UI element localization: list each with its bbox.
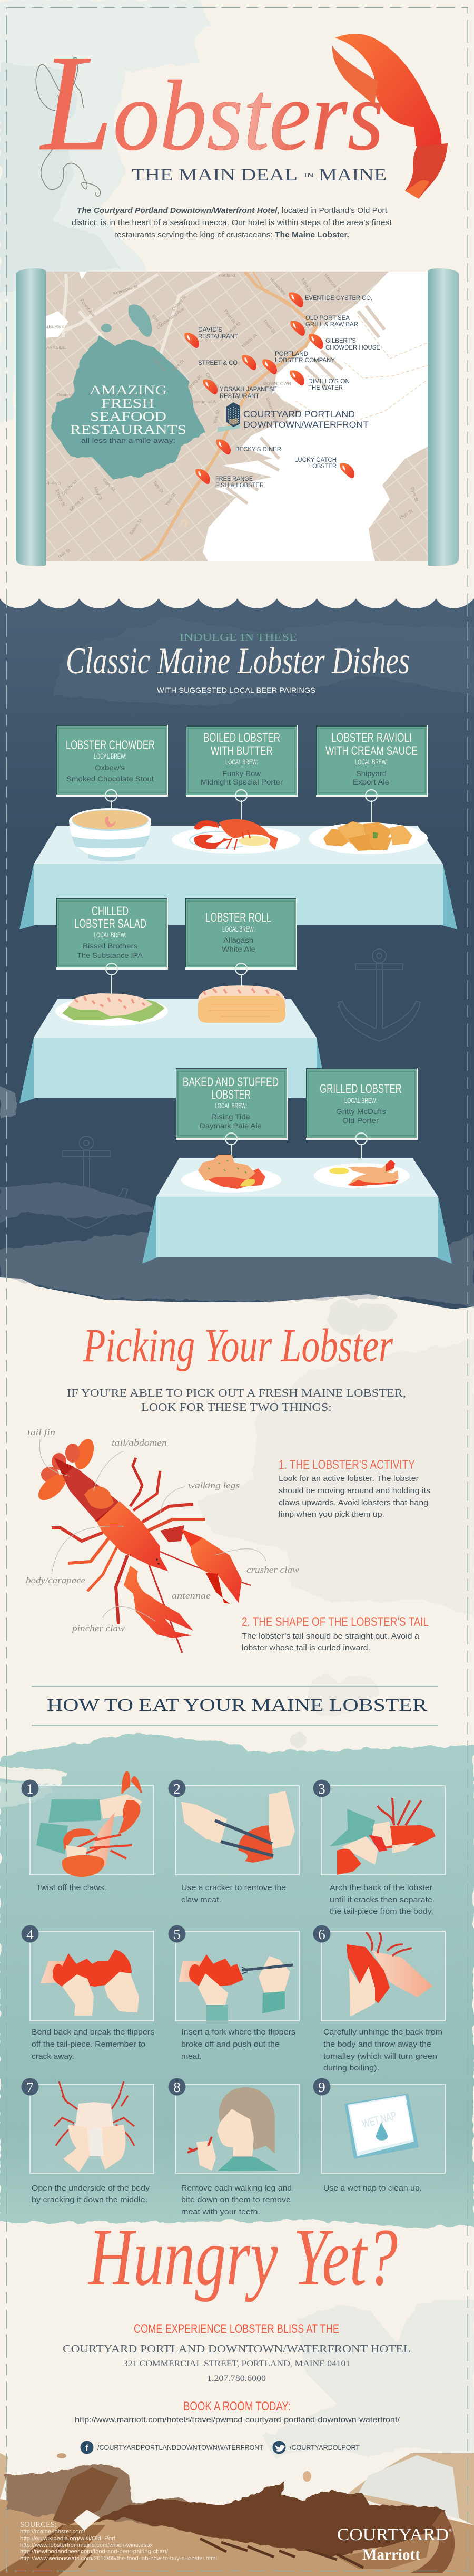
- map base: [46, 272, 428, 561]
- tip 2: 2. THE SHAPE OF THE LOBSTER'S TAIL: [242, 1615, 429, 1629]
- tip 1: should be moving around and holding its: [279, 1487, 430, 1495]
- ring stems row 2: [112, 974, 241, 995]
- table 3: [142, 1158, 452, 1264]
- step 3: [313, 1780, 445, 1875]
- waterfront piers: [200, 2539, 363, 2568]
- caption 9: Use a wet nap to clean up.: [323, 2184, 422, 2193]
- street labels: Spring St: [68, 495, 85, 512]
- menu card: lobster salad: CHILLED: [92, 904, 129, 918]
- step 5: [169, 1925, 299, 2021]
- callout labels: tail fin: [27, 1427, 55, 1437]
- caption 4: Bend back and break the flippers: [32, 2028, 154, 2037]
- social: facebook: f: [85, 2444, 88, 2453]
- menu card: baked and stuffed lobster: LOBSTER: [211, 1088, 251, 1102]
- street labels: Free St: [171, 358, 185, 372]
- street labels: Union Wharf: [265, 396, 279, 422]
- dish: lobster chowder bowl: [69, 808, 151, 861]
- crusher claw: [160, 1525, 184, 1542]
- restaurant: DiMillo's: [290, 370, 350, 391]
- piers: [226, 306, 384, 503]
- menu card: lobster salad: The Substance IPA: [77, 951, 143, 960]
- menu card: lobster roll: White Ale: [222, 945, 255, 953]
- step 8: [169, 2078, 299, 2173]
- menu card: grilled lobster: LOCAL BREW:: [344, 1096, 377, 1105]
- social: facebook: [80, 2441, 263, 2454]
- fishing line: [36, 58, 101, 196]
- street labels: Salem St: [128, 518, 143, 536]
- table 1: [19, 826, 457, 929]
- callout labels: pincher claw: [72, 1623, 125, 1633]
- social: facebook: /COURTYARDPORTLANDDOWNTOWNWATERFRONT: [97, 2444, 263, 2452]
- caption 6: tomalley (which will turn green: [323, 2052, 437, 2061]
- menu card: lobster roll: Allagash: [223, 936, 253, 944]
- section heading: classic dishes: WITH SUGGESTED LOCAL BEER PAIRINGS: [157, 686, 315, 694]
- badge 7: [21, 2078, 39, 2095]
- map text inside blob: FRESH: [101, 396, 154, 411]
- caption 6: during boiling).: [323, 2064, 379, 2073]
- street labels: York St: [164, 492, 177, 507]
- table 2: [19, 999, 323, 1103]
- menu card: boiled lobster: Midnight Special Porter: [201, 778, 283, 786]
- restaurant: Lucky Catch: [294, 457, 354, 478]
- harbor water: [203, 272, 428, 561]
- street labels: Hancock St: [323, 273, 342, 294]
- step 1: [21, 1772, 154, 1877]
- hillside left: [6, 2463, 196, 2525]
- map text inside blob: AMAZING: [90, 383, 167, 398]
- illustration: fork: [179, 1954, 293, 2021]
- menu card: lobster chowder: Smoked Chocolate Stout: [66, 774, 154, 783]
- badge 5: [169, 1925, 185, 1942]
- menu card: lobster salad: LOCAL BREW:: [94, 931, 126, 939]
- step 7: [21, 2078, 154, 2173]
- menu card: boiled lobster: [186, 725, 298, 801]
- park ponds and white: [129, 304, 152, 337]
- restaurant: Gilbert's: GILBERT'S: [325, 338, 356, 344]
- badge 9: [313, 2078, 331, 2095]
- illustration: person biting leg: [187, 2087, 278, 2171]
- hotel contact details: COURTYARD PORTLAND DOWNTOWN/WATERFRONT HOTEL: [63, 2342, 411, 2355]
- caption 8: bite down on them to remove: [181, 2196, 291, 2204]
- lobster anatomy diagram: [26, 1427, 300, 1653]
- ring stain: [303, 2471, 311, 2482]
- call to action: BOOK A ROOM TODAY:: [183, 2399, 291, 2414]
- tip 2: lobster whose tail is curled inward.: [242, 1644, 370, 1652]
- sources list: [20, 2521, 217, 2562]
- callout labels: crusher claw: [246, 1565, 300, 1575]
- caption 8: meat with your teeth.: [181, 2208, 260, 2216]
- subtitle: MAINE: [319, 166, 387, 185]
- caption 8: [181, 2184, 292, 2216]
- sources list: SOURCES:: [20, 2521, 57, 2529]
- menu card: grilled lobster: GRILLED LOBSTER: [320, 1082, 402, 1096]
- street labels: Hampshire: [269, 277, 288, 296]
- menu card: lobster roll: LOCAL BREW:: [222, 925, 255, 933]
- menu card: lobster salad: LOBSTER SALAD: [74, 917, 146, 931]
- caption 7: by cracking it down the middle.: [32, 2196, 147, 2204]
- street labels: Middle St: [241, 332, 258, 348]
- sources list: http://maine-lobster.com/: [20, 2529, 86, 2535]
- caption 8: Remove each walking leg and: [181, 2184, 292, 2193]
- street labels: T END: [47, 481, 61, 486]
- pincer claw: [124, 1566, 193, 1638]
- map text inside blob: all less than a mile away:: [81, 437, 175, 444]
- street labels: Portland: [219, 273, 235, 278]
- illustration: crack body: [54, 2081, 134, 2172]
- restaurant: Lucky Catch: LUCKY CATCH: [294, 457, 337, 463]
- step 6: [313, 1925, 445, 2021]
- caption 2: claw meat.: [181, 1896, 221, 1904]
- badge 2: 2: [173, 1781, 181, 1797]
- restaurant: DiMillo's: THE WATER: [308, 385, 343, 391]
- lower left shore: [0, 2525, 105, 2576]
- illustration: twist claw: [36, 1772, 142, 1877]
- sources list: http://www.seriouseats.com/2013/05/the-food-lab-how-to-buy-a-lobster.html: [20, 2555, 217, 2562]
- white wash patches: [74, 2510, 100, 2531]
- hotel label: COURTYARD PORTLAND: [243, 409, 355, 419]
- restaurant: Yosaku: [203, 379, 277, 400]
- carapace: [97, 1501, 168, 1571]
- footer: sepia view of Portland: [0, 2453, 474, 2576]
- menu card: baked and stuffed lobster: Rising Tide: [211, 1112, 250, 1121]
- street labels: DOWNTOWN: [263, 381, 291, 386]
- restaurant: Becky's: [216, 439, 281, 454]
- restaurant: Yosaku: RESTAURANT: [220, 393, 259, 400]
- menu card: boiled lobster: Funky Bow: [222, 769, 261, 778]
- heading word: Lobsters: [39, 26, 384, 179]
- section heading: classic dishes: [66, 632, 410, 694]
- street labels: Center St: [204, 372, 221, 390]
- restaurant: Free Range: FREE RANGE: [215, 476, 253, 482]
- badge 4: [21, 1925, 39, 1942]
- step 2: [169, 1780, 299, 1875]
- menu card: lobster ravioli: [316, 725, 428, 801]
- map text inside blob: RESTAURANTS: [70, 423, 186, 437]
- caption 4: [32, 2028, 154, 2061]
- badge 2: [169, 1780, 185, 1797]
- badge 4: 4: [26, 1926, 34, 1942]
- street labels: York St: [212, 409, 221, 425]
- subtitle: IN: [304, 171, 314, 179]
- watercolor wash: teal steps background: [0, 1733, 474, 2228]
- restaurant: Eventide: [289, 292, 372, 307]
- title: Lobsters: [36, 26, 384, 196]
- watercolor wash: footer: [263, 2299, 474, 2457]
- street labels: Tate St: [152, 480, 165, 495]
- subheading: picking: IF YOU'RE ABLE TO PICK OUT A FRESH MAINE LOBSTER,: [67, 1387, 406, 1399]
- dish: grilled lobster: [314, 1160, 410, 1188]
- street labels: Dyer St: [410, 487, 420, 502]
- dish: boiled lobster: [172, 819, 300, 854]
- hotel label: [243, 409, 369, 430]
- harbor headland right: [411, 2511, 455, 2573]
- street labels: Oxford St: [171, 294, 187, 312]
- menu card: lobster roll: [185, 898, 297, 975]
- badge 1: 1: [26, 1781, 34, 1797]
- tip 1: claws upwards. Avoid lobsters that hang: [279, 1499, 428, 1507]
- ring stems row 1: [111, 800, 371, 824]
- hotel contact details: 321 COMMERCIAL STREET, PORTLAND, MAINE 04101: [123, 2359, 350, 2368]
- badge 1: [21, 1780, 39, 1797]
- badge 3: [313, 1780, 331, 1797]
- sources list: http://en.wikipedia.org/wiki/Old_Port: [20, 2535, 115, 2542]
- dish: lobster ravioli: [309, 821, 428, 854]
- subtitle: THE MAIN DEAL: [132, 166, 298, 185]
- street labels: ARKSIDE: [46, 345, 66, 350]
- restaurant: David's: RESTAURANT: [198, 334, 238, 340]
- call to action: [75, 2399, 400, 2424]
- menu card: boiled lobster: LOCAL BREW:: [225, 758, 258, 766]
- scroll rollers: [16, 268, 459, 566]
- caption 6: [323, 2028, 442, 2073]
- callout labels: antennae: [172, 1591, 211, 1601]
- caption 6: Carefully unhinge the back from: [323, 2028, 442, 2037]
- illustration: cracker: [181, 1791, 295, 1863]
- restaurant: Free Range: FISH & LOBSTER: [215, 482, 264, 489]
- caption 5: broke off and push out the: [181, 2040, 280, 2049]
- menu card: baked and stuffed lobster: BAKED AND STUFFED: [183, 1075, 279, 1089]
- street labels: orth St: [57, 547, 71, 559]
- restaurant: Street and Co: STREET & CO: [198, 360, 238, 366]
- callout labels: body/carapace: [26, 1575, 85, 1585]
- tip 1: 1. THE LOBSTER'S ACTIVITY: [279, 1458, 415, 1472]
- street labels: Kennebec St: [113, 283, 139, 296]
- tip 2: [242, 1615, 429, 1652]
- watercolor wash: picking section: [196, 1301, 474, 1748]
- intro paragraph: district, is in the heart of a seafood mecca. Our hotel is within steps of the area’s finest: [72, 219, 392, 227]
- street labels: May St: [93, 486, 104, 501]
- call to action: http://www.marriott.com/hotels/travel/pwmcd-courtyard-portland-downtown-waterfront/: [75, 2415, 400, 2424]
- badge 6: [313, 1925, 331, 1942]
- icon: hotel: [218, 402, 240, 432]
- badge 6: 6: [318, 1926, 325, 1942]
- caption 5: meat.: [181, 2052, 202, 2061]
- tip 2: The lobster’s tail should be straight out. Avoid a: [242, 1632, 420, 1641]
- badge 8: [169, 2078, 185, 2095]
- caption 3: Arch the back of the lobster: [330, 1884, 432, 1892]
- highway: [139, 272, 316, 562]
- menu card: lobster salad: Bissell Brothers: [83, 942, 137, 950]
- menu card: baked and stuffed lobster: Daymark Pale Ale: [200, 1121, 262, 1130]
- caption 2: Use a cracker to remove the: [181, 1884, 286, 1892]
- menu card: baked and stuffed lobster: [176, 1068, 288, 1145]
- menu card: boiled lobster: WITH BUTTER: [211, 744, 273, 758]
- menu card: baked and stuffed lobster: LOCAL BREW:: [215, 1101, 247, 1110]
- menu card: boiled lobster: BOILED LOBSTER: [203, 731, 280, 745]
- panel: scroll map: [16, 268, 459, 566]
- caption 3: until it cracks then separate: [330, 1896, 432, 1904]
- menu card: lobster ravioli: LOCAL BREW:: [355, 758, 388, 766]
- street labels: Elm St: [151, 314, 164, 327]
- section heading: classic dishes: INDULGE IN THESE: [180, 632, 297, 643]
- caption 5: Insert a fork where the flippers: [181, 2028, 295, 2037]
- tail fins: [34, 1436, 97, 1505]
- restaurant: Lucky Catch: LOBSTER: [309, 463, 337, 470]
- caption 1: Twist off the claws.: [36, 1884, 106, 1892]
- step 9: [313, 2078, 445, 2173]
- restaurant: David's: [184, 327, 238, 348]
- restaurant: Free Range: [195, 469, 264, 489]
- menu card: grilled lobster: [306, 1068, 418, 1145]
- street labels: Deering: [57, 392, 73, 398]
- caption 3: [330, 1884, 433, 1916]
- restaurant: Becky's: BECKY'S DINER: [235, 447, 281, 453]
- town: [79, 2482, 448, 2557]
- restaurant: Yosaku: YOSAKU JAPANESE: [220, 386, 277, 393]
- restaurant: Portland Lobster Company: PORTLAND: [275, 351, 308, 357]
- illustration: wet nap packet: [344, 2094, 419, 2159]
- hotel contact details: [63, 2322, 411, 2383]
- caption 5: [181, 2028, 295, 2061]
- intro paragraph: [72, 207, 392, 239]
- restaurant: Old Port Sea Grill: [290, 315, 358, 336]
- restaurant: Eventide: EVENTIDE OYSTER CO.: [305, 295, 372, 302]
- badge 5: 5: [173, 1926, 181, 1942]
- street labels: Cumberland Ave: [155, 306, 185, 331]
- menu card: lobster ravioli: WITH CREAM SAUCE: [325, 744, 418, 758]
- street labels: [46, 273, 420, 559]
- restaurant: Gilbert's: CHOWDER HOUSE: [325, 345, 380, 351]
- badge 9: 9: [318, 2079, 325, 2095]
- sources list: http://www.lobsterfrommaine.com/which-wine.aspx: [20, 2542, 153, 2549]
- restaurant: DiMillo's: DIMILLO'S ON: [308, 379, 350, 385]
- caption 4: crack away.: [32, 2052, 74, 2061]
- street labels: Clark St: [102, 477, 117, 492]
- subheading: picking: [67, 1387, 406, 1413]
- logo: Courtyard Marriott: Marriott: [362, 2546, 420, 2563]
- badge 8: 8: [173, 2079, 181, 2095]
- restaurant: Portland Lobster Company: [262, 351, 335, 374]
- tip 1: [279, 1458, 430, 1519]
- scallop edge: [0, 590, 474, 608]
- street labels: Emery St: [54, 489, 67, 508]
- street labels: Pearl St: [223, 308, 237, 325]
- ring stems row 3: [231, 1144, 361, 1163]
- caption 7: Open the underside of the body: [32, 2184, 150, 2193]
- panel: classic dishes dark background: [0, 596, 474, 1309]
- intro paragraph: restaurants serving the king of crustaceans: The Maine Lobster.: [114, 231, 349, 239]
- tip 1: Look for an active lobster. The lobster: [279, 1475, 419, 1483]
- menu card: grilled lobster: Gritty McDuffs: [336, 1107, 386, 1116]
- caption 6: the body and throw away the: [323, 2040, 431, 2049]
- street labels: Pearl St: [262, 319, 277, 335]
- hotel contact details: 1.207.780.6000: [207, 2374, 266, 2383]
- pale sky wash: [0, 2453, 474, 2525]
- menu card: lobster ravioli: Shipyard: [356, 769, 387, 778]
- logo: Courtyard Marriott: ®: [449, 2528, 452, 2533]
- menu card: lobster chowder: Oxbow's: [95, 763, 125, 772]
- legs and antennae: [52, 1458, 251, 1653]
- heading: how to eat: HOW TO EAT YOUR MAINE LOBSTER: [47, 1696, 427, 1715]
- icon: anchor right: [338, 949, 420, 1041]
- badge 7: 7: [26, 2079, 34, 2095]
- watercolor wash: top left: [0, 0, 209, 423]
- caption 3: the tail-piece from the body.: [330, 1907, 433, 1916]
- menu card: grilled lobster: Old Porter: [342, 1116, 379, 1125]
- illustration: break flippers: [41, 1950, 139, 2016]
- callout labels: walking legs: [188, 1480, 240, 1490]
- intro paragraph: The Courtyard Portland Downtown/Waterfront Hotel , located in Portland’s Old Port: [77, 207, 387, 215]
- caption 2: [181, 1884, 286, 1904]
- map text inside blob: [70, 383, 186, 444]
- water and land: [0, 2499, 474, 2576]
- step 4: [21, 1925, 154, 2021]
- restaurant: Old Port Sea Grill: OLD PORT SEA: [305, 315, 350, 322]
- street labels: India St: [300, 277, 313, 294]
- social: twitter: /COURTYARDOLPORT: [290, 2444, 360, 2452]
- callout labels: [26, 1427, 300, 1633]
- badge 3: 3: [318, 1781, 325, 1797]
- street labels: aks Park: [46, 324, 64, 329]
- restaurant: Portland Lobster Company: LOBSTER COMPANY: [275, 357, 335, 364]
- callout labels: tail/abdomen: [112, 1438, 167, 1448]
- street labels: Forest Ave: [79, 298, 96, 318]
- sources list: http://newfoodandbeer.com/food-and-beer-pairing-chart/: [20, 2549, 169, 2555]
- street labels: Federal St: [223, 320, 242, 338]
- restaurant: David's: DAVID'S: [198, 327, 222, 333]
- social: twitter: [273, 2441, 360, 2454]
- restaurant: Gilbert's: [309, 334, 380, 351]
- callout lines: [39, 1439, 266, 1621]
- street labels: Casco St: [152, 356, 168, 373]
- logo: Courtyard Marriott: [337, 2525, 452, 2563]
- tip 1: limp when you pick them up.: [279, 1510, 384, 1519]
- menu card: lobster ravioli: LOBSTER RAVIOLI: [331, 731, 412, 745]
- subheading: picking: LOOK FOR THESE TWO THINGS:: [141, 1401, 332, 1413]
- caption 4: off the tail-piece. Remember to: [32, 2040, 145, 2049]
- restaurant: Old Port Sea Grill: GRILL & RAW BAR: [305, 322, 358, 328]
- menu card: lobster salad: [56, 898, 168, 975]
- restaurant: Street and Co: [198, 355, 256, 370]
- menu card: lobster ravioli: Export Ale: [353, 778, 389, 786]
- logo: Courtyard Marriott: COURTYARD: [337, 2525, 449, 2544]
- hotel contact details: COME EXPERIENCE LOBSTER BLISS AT THE: [134, 2322, 339, 2336]
- hotel label: DOWNTOWN/WATERFRONT: [243, 420, 369, 430]
- ferry routes: [295, 316, 428, 427]
- menu card: lobster chowder: LOBSTER CHOWDER: [66, 738, 155, 752]
- illustration: wet nap packet: WET NAP: [361, 2109, 398, 2130]
- icon: lobster claw: [332, 34, 448, 199]
- dish: lobster salad: [55, 993, 168, 1026]
- big teal blob: [52, 337, 205, 478]
- street labels: High St: [398, 508, 414, 520]
- dish: baked stuffed lobster: [181, 1155, 281, 1193]
- caption 7: [32, 2184, 150, 2204]
- menu card: lobster chowder: LOCAL BREW:: [94, 752, 126, 760]
- street labels: Museum of Art: [190, 399, 219, 404]
- menu card: lobster roll: LOBSTER ROLL: [205, 911, 271, 925]
- map text inside blob: SEAFOOD: [90, 410, 166, 424]
- subtitle: [132, 166, 387, 185]
- menu card: lobster chowder: [56, 725, 168, 801]
- street labels: Spruce St: [60, 478, 78, 496]
- icon: anchor left: [45, 1136, 127, 1228]
- illustration: arch lobster: [330, 1798, 436, 1875]
- dish: lobster roll: [198, 985, 285, 1023]
- street labels: Spring St: [185, 374, 203, 391]
- illustration: unhinge back: [347, 1932, 432, 2017]
- tail segments: [54, 1458, 120, 1523]
- heading: picking your lobster: Picking Your Lobster: [83, 1320, 393, 1372]
